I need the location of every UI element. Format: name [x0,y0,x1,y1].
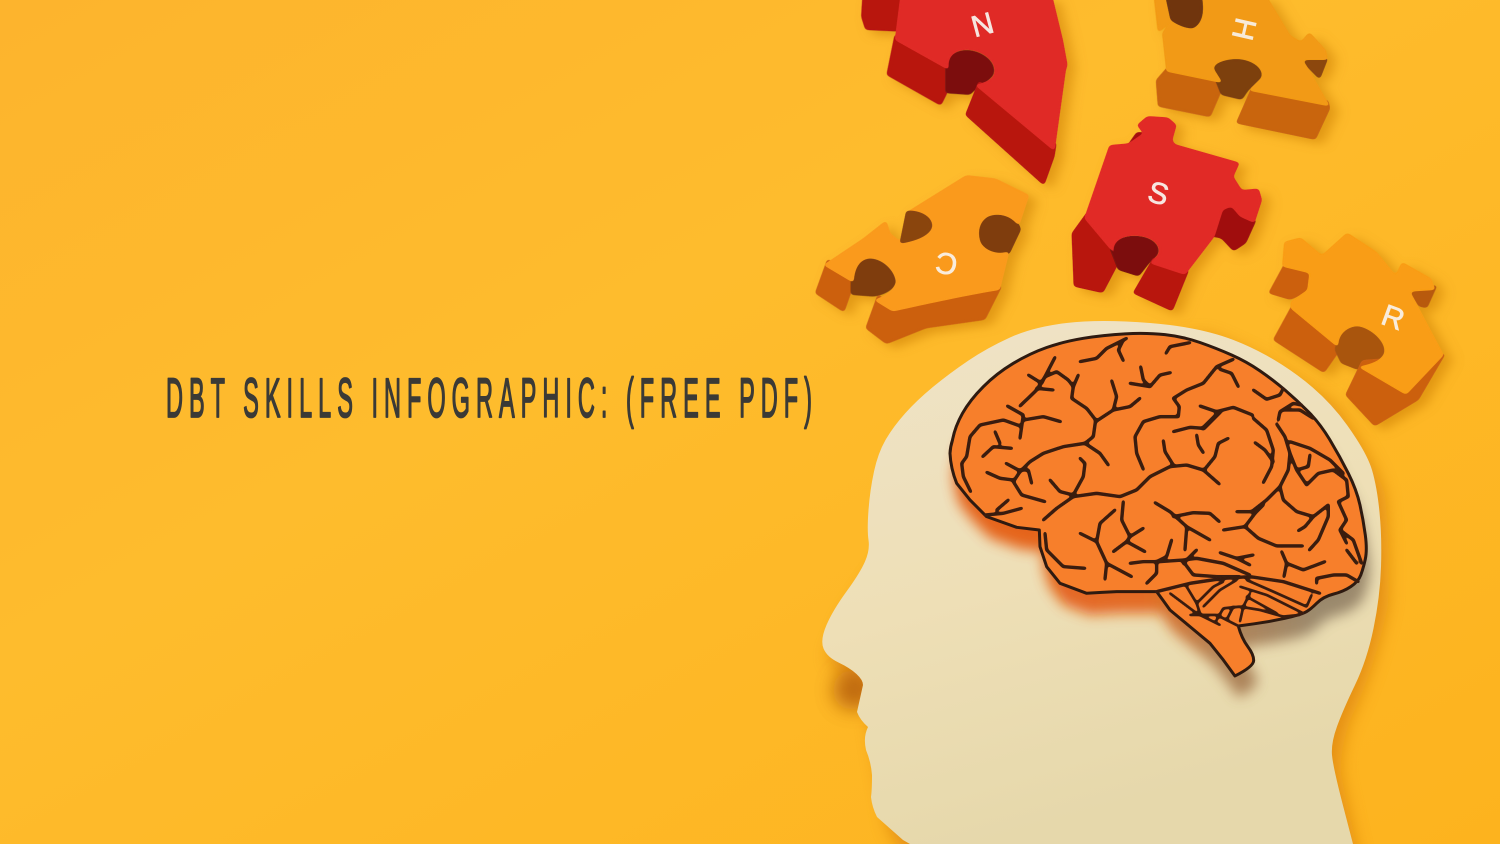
brain shadow [953,355,1370,698]
brain outline [950,333,1366,676]
puzzle piece: C: C [933,245,960,281]
puzzle piece: S [1071,116,1262,312]
puzzle piece: S: S [1144,176,1172,213]
puzzle piece: H [1154,0,1330,140]
cerebellum [1157,577,1320,626]
brain folds [962,338,1362,583]
puzzle piece: N: N [968,7,997,44]
puzzle piece: N [861,0,1068,186]
title: DBT SKILLS INFOGRAPHIC: (FREE PDF) [166,367,812,430]
head silhouette [822,321,1381,844]
puzzle piece: R: R [1377,299,1409,337]
puzzle piece: C [815,175,1029,344]
puzzle piece: H: H [1225,15,1262,43]
brain [950,333,1370,698]
puzzle piece: R [1268,232,1446,427]
puzzle pieces [815,0,1446,427]
head silhouette shadow [828,335,1389,844]
